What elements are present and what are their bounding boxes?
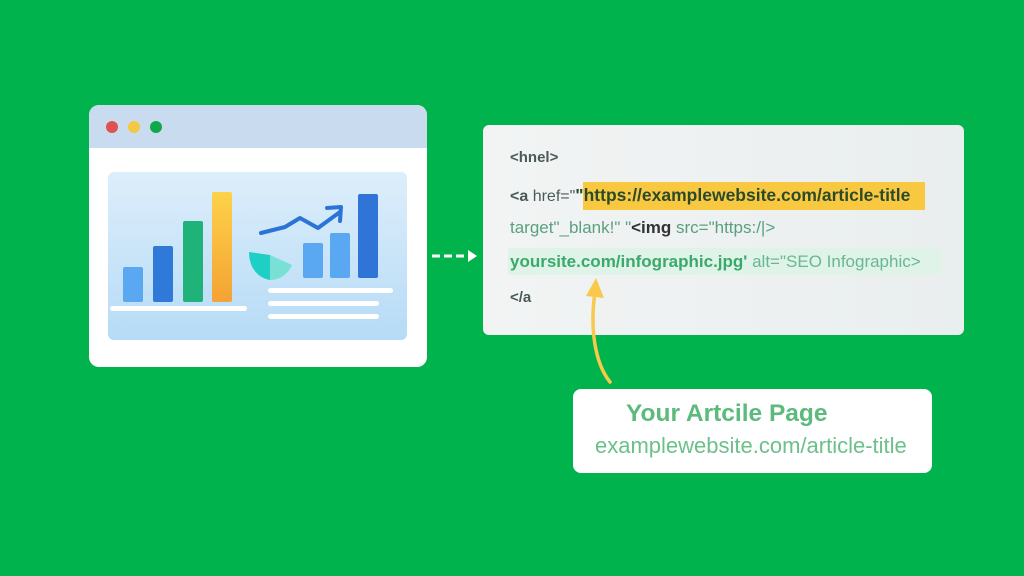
- title bar: [89, 105, 427, 148]
- arrow: yellow curved: [586, 278, 612, 384]
- highlight yellow: [583, 182, 925, 210]
- code panel: [483, 125, 964, 335]
- chart panel: [108, 172, 407, 340]
- browser window illustration: [89, 105, 427, 367]
- code panel: target"_blank!" "<img src="https:/|>: [510, 218, 775, 237]
- window dots: [106, 121, 162, 133]
- bar chart left: [110, 192, 247, 311]
- code panel: <a href=""https://examplewebsite.com/article-title: [510, 185, 910, 205]
- arrow: dashed to code: [432, 250, 477, 262]
- code lines: <hnel>: [510, 149, 558, 166]
- highlight green: [508, 248, 942, 275]
- trend chart right: [249, 194, 393, 319]
- callout: article page: [573, 389, 932, 473]
- code panel: yoursite.com/infographic.jpg' alt="SEO Infographic>: [510, 252, 921, 271]
- callout title: Your Artcile Page: [626, 400, 828, 427]
- callout url: examplewebsite.com/article-title: [595, 433, 907, 458]
- code panel: </a: [510, 289, 531, 306]
